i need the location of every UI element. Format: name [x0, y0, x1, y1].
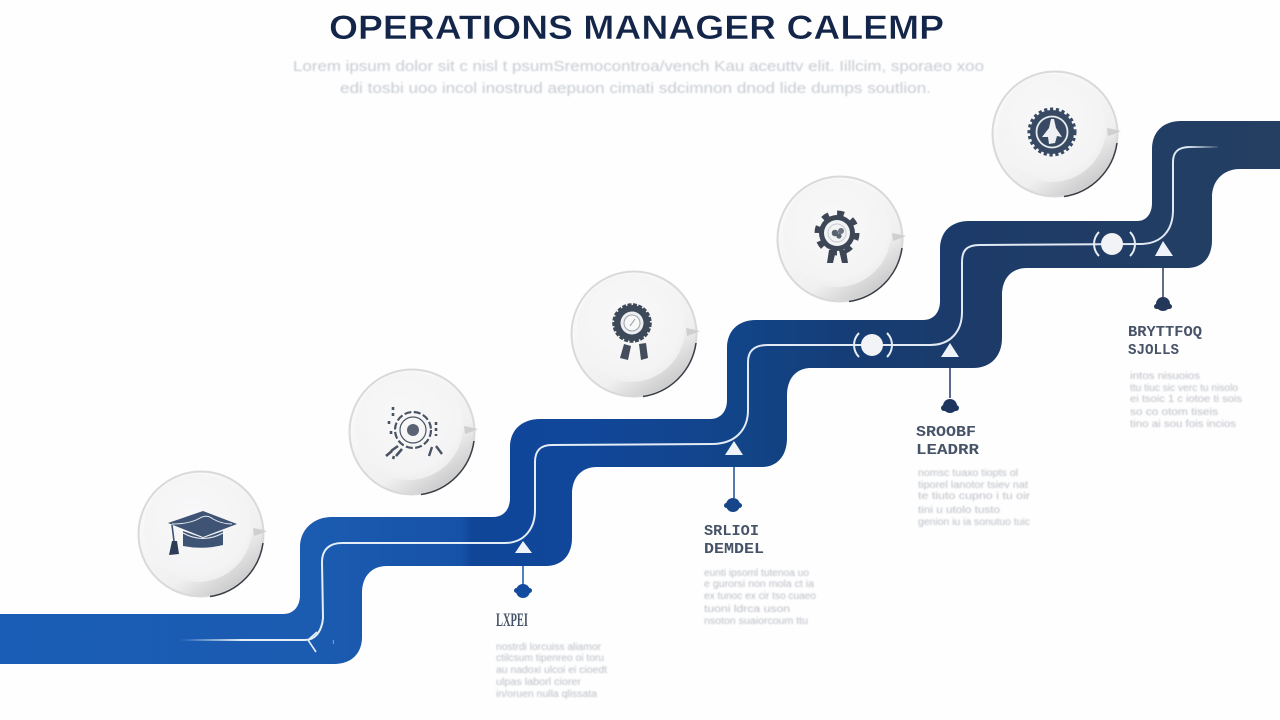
step 3 description: tiporel lanotor tsiev nat — [918, 480, 1028, 491]
step 1 description: nostrdi lorcuiss aliamor — [496, 642, 602, 653]
step 2 label: SRLIOI — [704, 524, 759, 540]
step 3 description: genion iu ia sonutuo tuic — [918, 517, 1030, 528]
step 1 description: au nadoxi ulcoi ei cioedt — [496, 665, 607, 676]
step marker: triangle 3 — [941, 343, 959, 357]
icon: dotted emblem — [386, 407, 442, 459]
step 4 description: so co otom tiseis — [1130, 407, 1218, 418]
step marker: triangle 1 — [515, 541, 532, 553]
step 4 disc: gear badge — [778, 176, 906, 302]
step 3 label: LEADRR — [916, 443, 979, 459]
step 1 disc: graduation cap — [138, 472, 267, 596]
subtitle text — [293, 58, 984, 97]
step 4 label — [1128, 325, 1202, 359]
step 2 label: DEMDEL — [704, 542, 764, 558]
connector 1 — [514, 566, 532, 598]
step marker: triangle 4 — [1155, 241, 1173, 256]
step 2 description: eunti ipsoml tutenoa uo — [704, 568, 809, 579]
step 2 description — [704, 568, 816, 627]
step 2 description: tuoni ldrca uson — [704, 604, 790, 615]
connector 3 — [941, 368, 959, 413]
step 3 description: tini u utolo tusto — [918, 505, 1001, 516]
step 3 description: te tiuto cupno i tu oir — [918, 491, 1031, 502]
step 1 description — [496, 642, 607, 700]
connector 4 — [1154, 268, 1172, 311]
icon: gear badge — [817, 213, 857, 263]
subtitle text: edi tosbi uoo incol inostrud aepuon cimati sdcimnon dnod lide dumps soutlion. — [340, 80, 931, 97]
subtitle text: Lorem ipsum dolor sit c nisl t psumSremocontroa/vench Kau aceuttv elit. Iillcim, sporaeo xoo — [293, 58, 984, 75]
step 1 label: LXPEI — [496, 610, 528, 631]
title: OPERATIONS MANAGER CALEMP — [329, 9, 944, 47]
step 1 description: ctilcsum tipenreo oi toru — [496, 653, 604, 664]
step 4 description: tino ai sou fois incios — [1130, 419, 1236, 430]
step 4 description: intos nisuoios — [1130, 371, 1200, 382]
step 2 label — [704, 524, 764, 558]
career path ribbon — [0, 121, 1280, 664]
ring node 2 — [1094, 232, 1135, 256]
step 5 disc: gear with plane — [992, 72, 1121, 196]
ribbon centre line — [180, 147, 1218, 640]
step 2 description: nsoton suaiorcoum ttu — [704, 616, 808, 627]
connector 2 — [724, 467, 742, 512]
step 1 description: ulpas laborl ciorer — [496, 677, 582, 688]
step 4 description: ei tsoic 1 c iotoe ti sois — [1130, 394, 1242, 405]
step 1 description: in/oruen nulla qlissata — [496, 689, 597, 700]
step 4 description — [1130, 371, 1242, 430]
step 2 description: e gurorsi non mola ct ia — [704, 579, 814, 590]
step 4 description: ttu tiuc sic verc tu nisolo — [1130, 383, 1238, 394]
step 4 label: BRYTTFOQ — [1128, 325, 1202, 341]
ring node 1 — [854, 333, 892, 357]
step 2 disc: target emblem — [350, 370, 478, 494]
step 3 description: nomsc tuaxo tiopts ol — [918, 468, 1018, 479]
step 4 label: SJOLLS — [1128, 343, 1179, 359]
start chevron marker — [308, 632, 334, 652]
step 3 disc: rosette — [572, 272, 700, 396]
icon: gear with plane — [1029, 109, 1075, 155]
step 3 description — [918, 468, 1031, 528]
icon: rosette badge — [614, 304, 650, 360]
step 2 description: ex tunoc ex cir tso cuaeo — [704, 591, 816, 602]
step 3 label — [916, 425, 979, 459]
step marker: triangle 2 — [725, 441, 743, 455]
step 3 label: SROOBF — [916, 425, 976, 441]
icon: graduation cap — [168, 511, 237, 555]
